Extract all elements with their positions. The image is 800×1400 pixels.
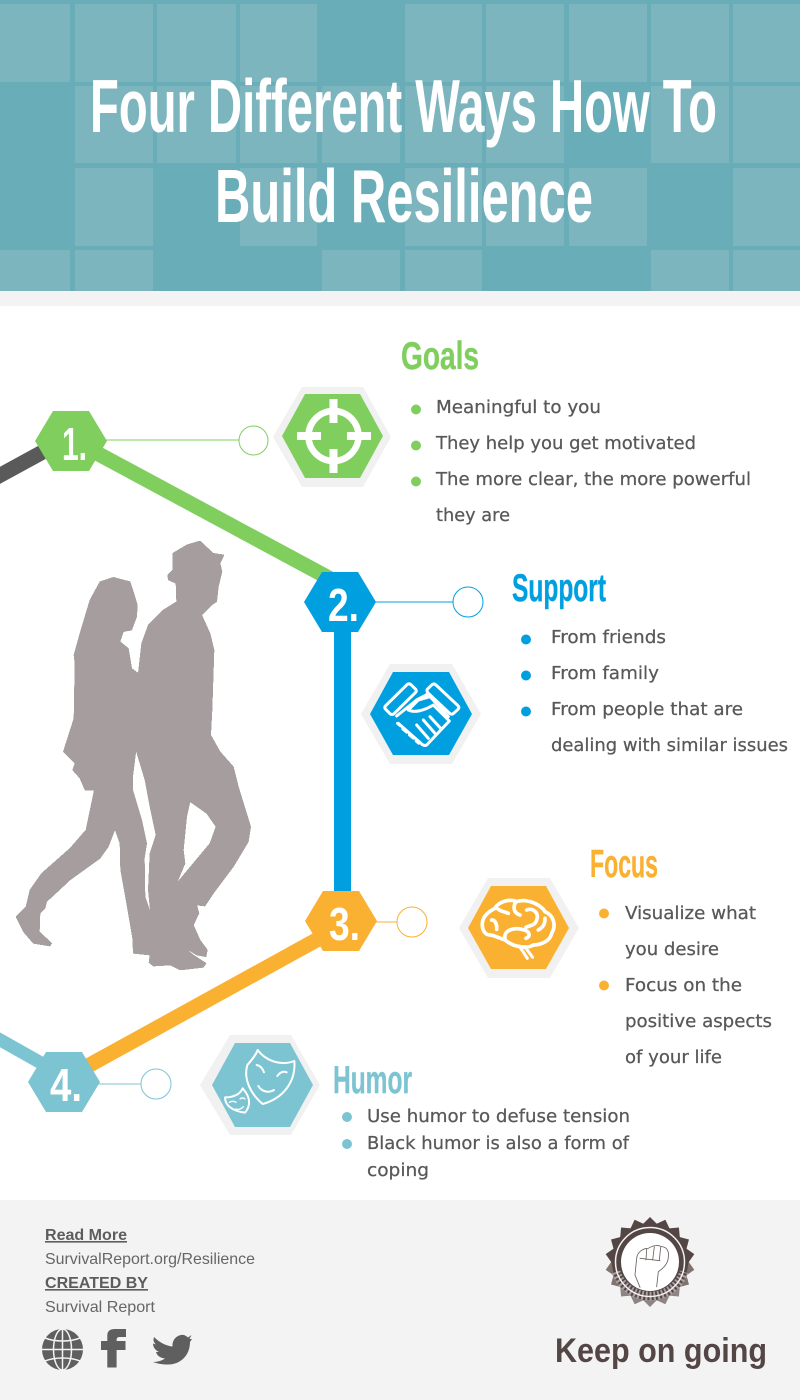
footer credits: CREATED BY — [45, 1275, 148, 1292]
logo badge: fist emblem — [604, 1217, 696, 1307]
brand name: Keep on going — [555, 1332, 767, 1370]
number hexagon 3 — [305, 891, 377, 951]
list: support: dealing with similar issues — [551, 736, 788, 756]
list: goals: Meaningful to you — [436, 398, 601, 418]
list: focus: positive aspects — [625, 1012, 772, 1032]
number hexagon 1 — [35, 411, 107, 471]
list: focus — [599, 904, 772, 1068]
list: support: From friends — [551, 628, 666, 648]
header banner — [0, 0, 800, 291]
list: goals: They help you get motivated — [435, 434, 696, 454]
title: Build Resilience — [215, 154, 593, 238]
list: goals — [411, 398, 751, 526]
number hexagon 4: 4. — [50, 1059, 82, 1111]
list: focus: Visualize what — [625, 904, 756, 924]
icon: brain — [459, 878, 579, 978]
heading: support: Support — [512, 567, 606, 610]
footer — [0, 1200, 800, 1400]
step 2: support — [304, 567, 788, 764]
connector 3 — [372, 907, 427, 937]
list: support: From family — [551, 664, 659, 684]
heading: focus: Focus — [590, 843, 658, 886]
list: humor: coping — [367, 1161, 429, 1181]
silhouette: couple walking — [16, 541, 251, 970]
list: focus: Focus on the — [625, 976, 742, 996]
heading: goals: Goals — [401, 335, 479, 378]
connector 2 — [370, 587, 483, 617]
list: humor: Use humor to defuse tension — [367, 1107, 630, 1127]
icon: twitter — [153, 1335, 192, 1364]
footer credits: Read More — [45, 1227, 127, 1244]
number hexagon 1: 1. — [62, 418, 87, 470]
heading: humor: Humor — [333, 1059, 412, 1102]
list: humor: Black humor is also a form of — [367, 1134, 630, 1154]
number hexagon 3: 3. — [329, 898, 360, 950]
list: goals: The more clear, the more powerful — [435, 470, 751, 490]
timeline path — [0, 444, 342, 1078]
title — [90, 64, 717, 238]
step 4: humor — [28, 1035, 630, 1181]
icon: target crosshair — [273, 387, 391, 487]
list: support — [521, 628, 788, 756]
step 3: focus — [305, 843, 772, 1068]
icon: theatre masks — [200, 1035, 320, 1135]
number hexagon 2 — [304, 572, 376, 632]
icon: facebook — [101, 1329, 126, 1368]
icon: handshake — [361, 664, 481, 764]
step 1: goals — [35, 335, 751, 526]
list: focus: you desire — [625, 940, 719, 960]
list: focus: of your life — [625, 1048, 722, 1068]
list: support: From people that are — [551, 700, 743, 720]
footer credits: SurvivalReport.org/Resilience — [45, 1251, 255, 1268]
connector 4 — [95, 1069, 171, 1099]
number hexagon 4 — [28, 1052, 100, 1112]
footer credits — [45, 1227, 255, 1316]
list: humor — [342, 1107, 630, 1181]
number hexagon 2: 2. — [328, 579, 359, 631]
list: goals: they are — [436, 506, 510, 526]
icon: globe — [42, 1329, 83, 1370]
connector 1 — [100, 426, 268, 455]
footer credits: Survival Report — [45, 1299, 156, 1316]
